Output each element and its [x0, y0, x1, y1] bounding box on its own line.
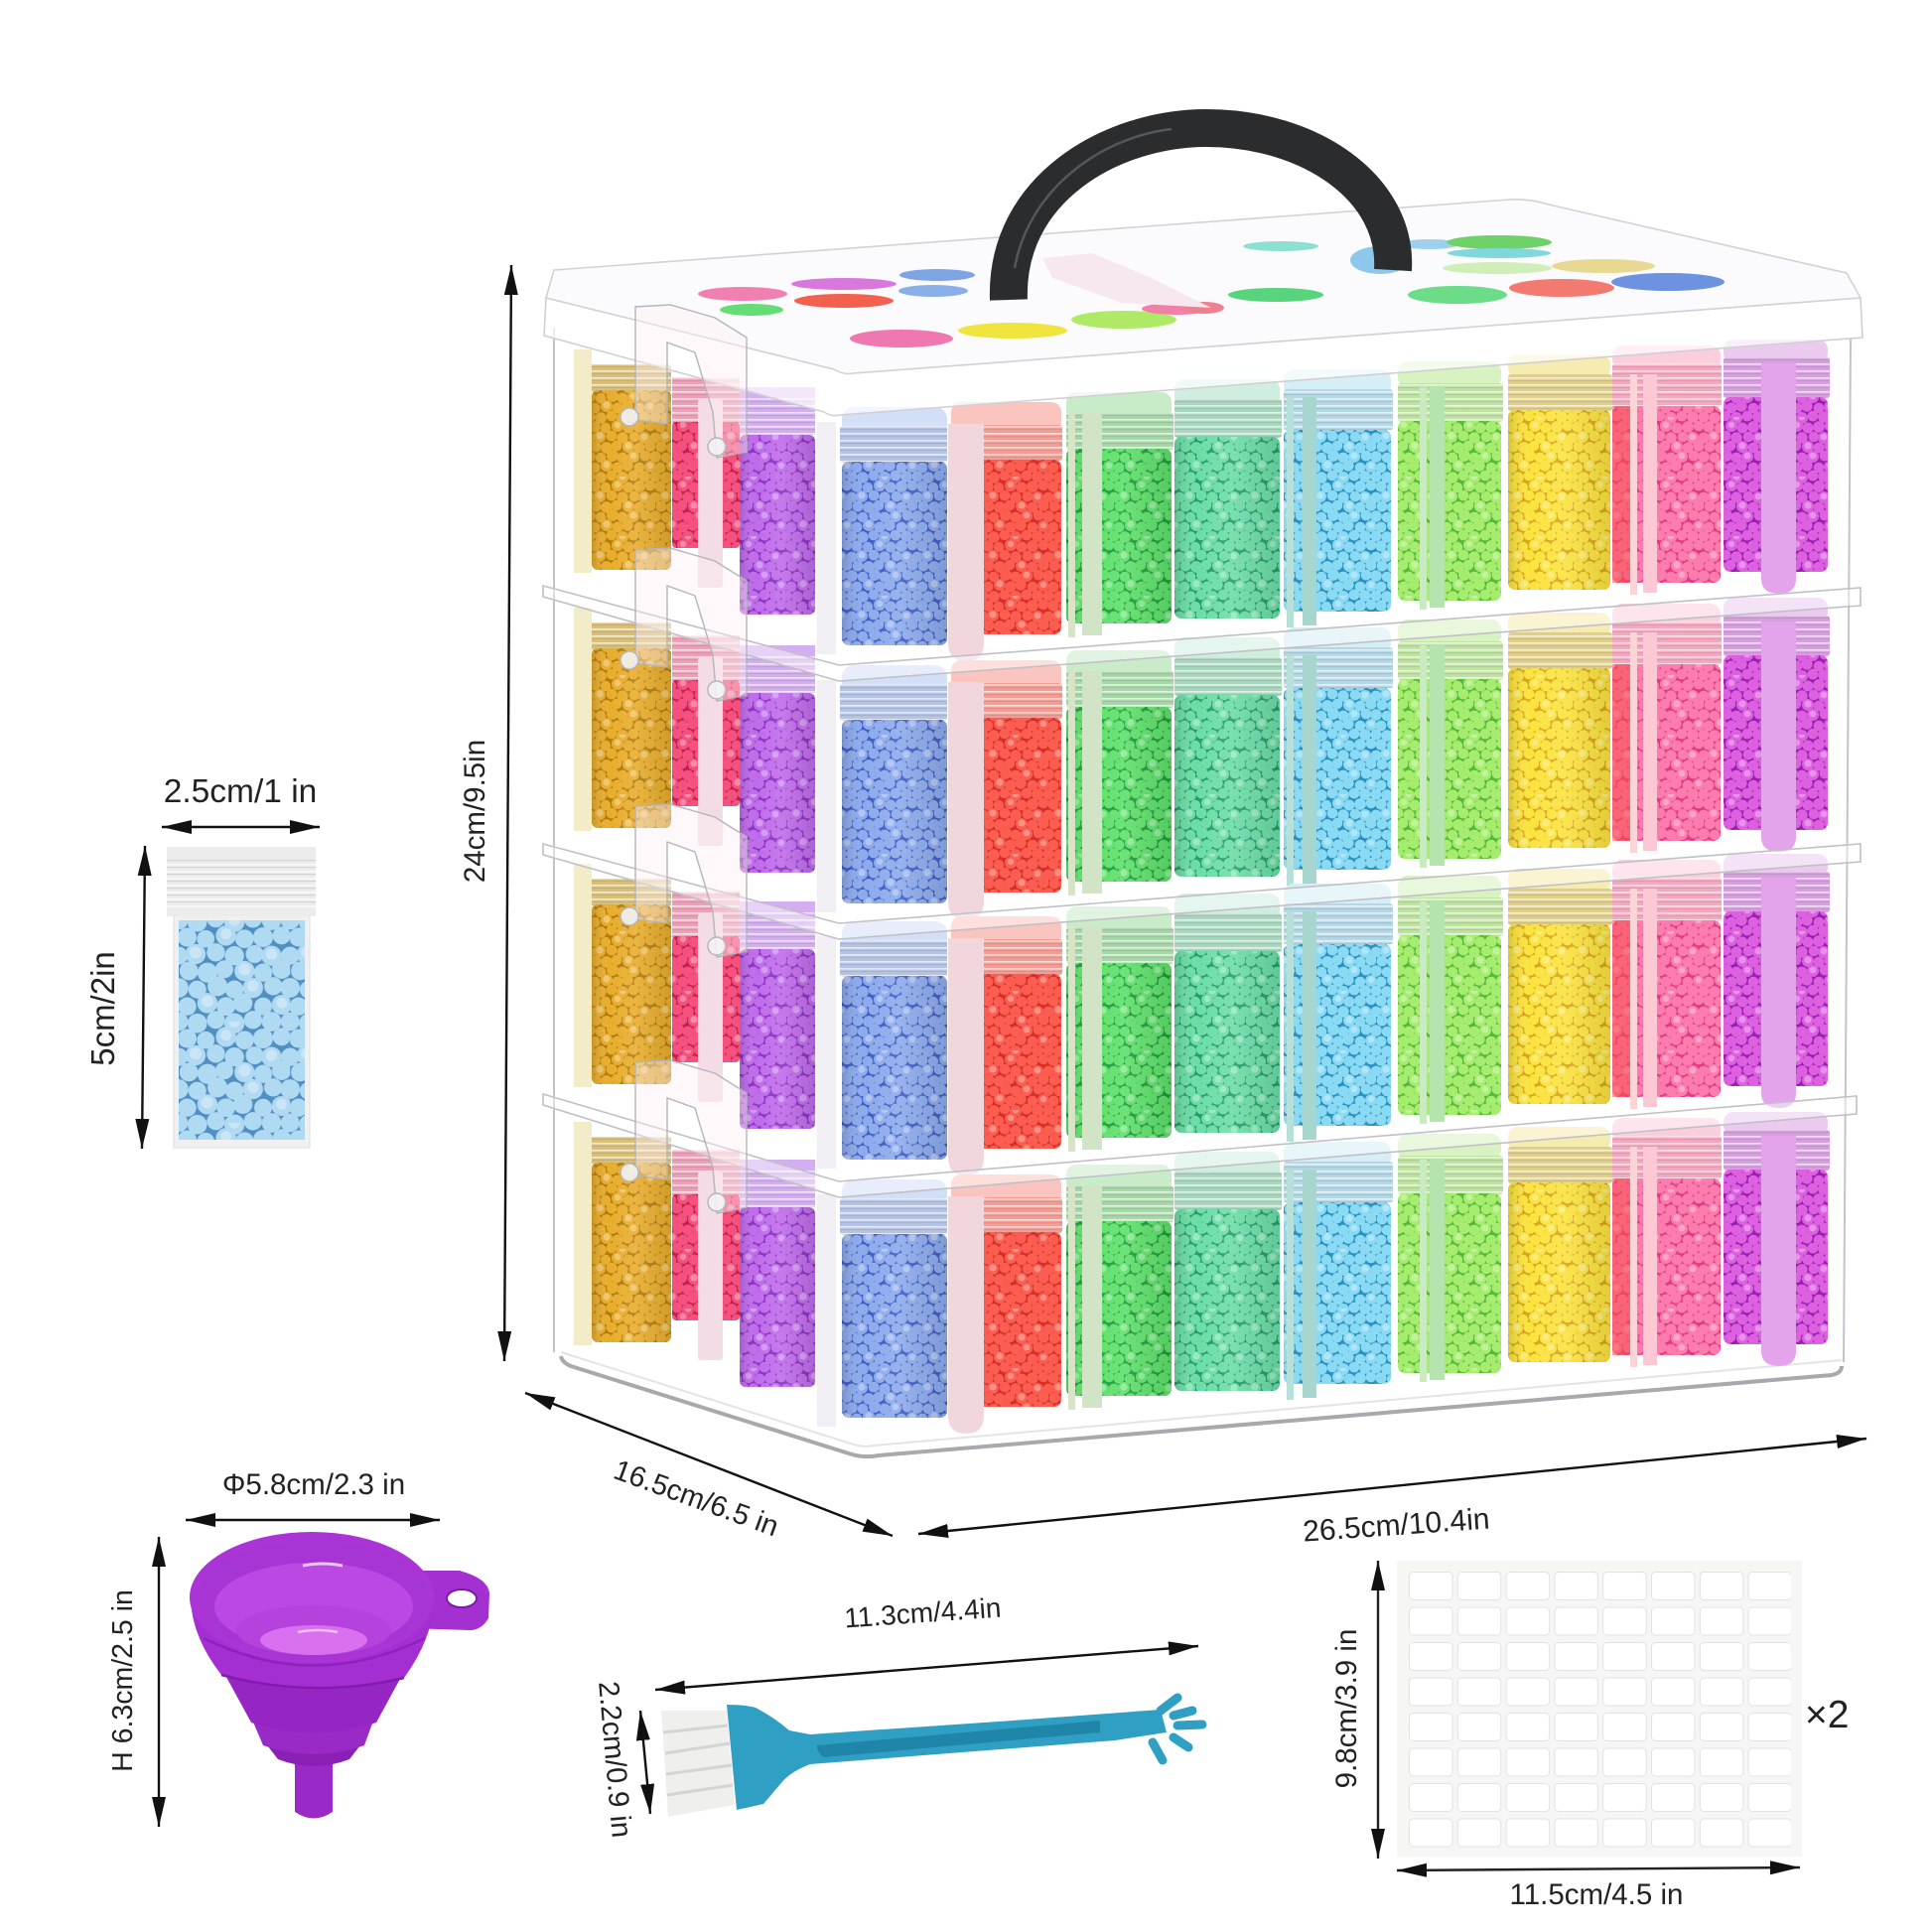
dimension: sheet width: 11.5cm/4.5 in: [1510, 1878, 1683, 1911]
divider strips: [817, 363, 1796, 661]
latches row 1: [621, 305, 747, 458]
latches row 3: [621, 804, 747, 957]
tier 2 of bottles: [574, 598, 1830, 919]
bottle: rose pink: [672, 377, 740, 588]
dimension: bottle width: 2.5cm/1 in: [164, 773, 317, 810]
black carry handle: [1009, 128, 1393, 300]
latches row 4: [621, 1060, 747, 1213]
clear latches: [621, 548, 747, 701]
bottle: green: [1066, 392, 1173, 623]
funnel middle ring: [249, 1713, 376, 1754]
dimension: sheet height: 9.8cm/3.9 in: [1330, 1629, 1363, 1788]
tier 1 of bottles: [574, 340, 1830, 661]
tier 3 of bottles: [574, 854, 1830, 1175]
funnel upper ring: [221, 1668, 406, 1733]
funnel tab: [407, 1571, 489, 1630]
bottle: red: [951, 402, 1062, 634]
dimension: box depth: [525, 1393, 893, 1543]
dimension: box width: 26.5cm/10.4in: [1302, 1502, 1490, 1549]
dimension: bottle height: [84, 846, 145, 1149]
icon: blue cleaning brush: [661, 1698, 1202, 1817]
bottle: violet: [740, 387, 815, 615]
bottle: blue: [840, 407, 947, 645]
bottle tops seen through the lid: [698, 235, 1725, 347]
funnel stem: [295, 1752, 333, 1819]
dimension: box depth: 16.5cm/6.5 in: [610, 1454, 782, 1543]
dimension: box height: [459, 265, 511, 1361]
bottle: pink: [1612, 345, 1722, 583]
dimension: bottle height: 5cm/2in: [84, 951, 121, 1066]
label sticker sheet: [1397, 1561, 1802, 1857]
dimension: sheet width: [1397, 1867, 1800, 1911]
lid side band: [544, 298, 1863, 416]
dimension: funnel diameter: Φ5.8cm/2.3 in: [222, 1468, 405, 1501]
dimension: brush width: 2.2cm/0.9 in: [592, 1680, 637, 1839]
box frame edges: [554, 328, 1851, 1362]
brush bristles: [661, 1711, 735, 1817]
icon: purple silicone funnel: [190, 1532, 489, 1819]
shelf rims between tiers: [543, 586, 1861, 1197]
funnel rim and interior: [190, 1532, 434, 1663]
lid top surface: [546, 200, 1861, 373]
pale sheet under handle: [1042, 253, 1211, 308]
funnel lower ring: [261, 1737, 366, 1766]
funnel rim band: [191, 1600, 434, 1690]
storage box base plate: [561, 1335, 1842, 1456]
dimension: funnel height: H 6.3cm/2.5 in: [107, 1589, 139, 1772]
brush hand fingers: [1153, 1698, 1202, 1760]
bottle: yellow: [1508, 354, 1612, 590]
bottle: sky blue: [1284, 369, 1393, 612]
bottle: magenta: [1724, 340, 1830, 572]
bottle: lime: [1398, 361, 1503, 601]
dimension: box width: [918, 1439, 1866, 1549]
single bead bottle: [167, 847, 316, 1148]
tier 4 of bottles: [574, 1112, 1830, 1434]
quantity label: ×2: [1805, 1694, 1849, 1736]
bottle: orange: [592, 364, 671, 570]
storage box lid: [544, 200, 1863, 416]
bottle: teal: [1174, 379, 1282, 619]
dimension: brush length: 11.3cm/4.4in: [843, 1592, 1002, 1634]
dimension: brush length: [655, 1592, 1198, 1690]
cream side strip: [574, 349, 592, 573]
brush handle: [727, 1705, 1167, 1810]
dimension: box height: 24cm/9.5in: [459, 740, 491, 883]
